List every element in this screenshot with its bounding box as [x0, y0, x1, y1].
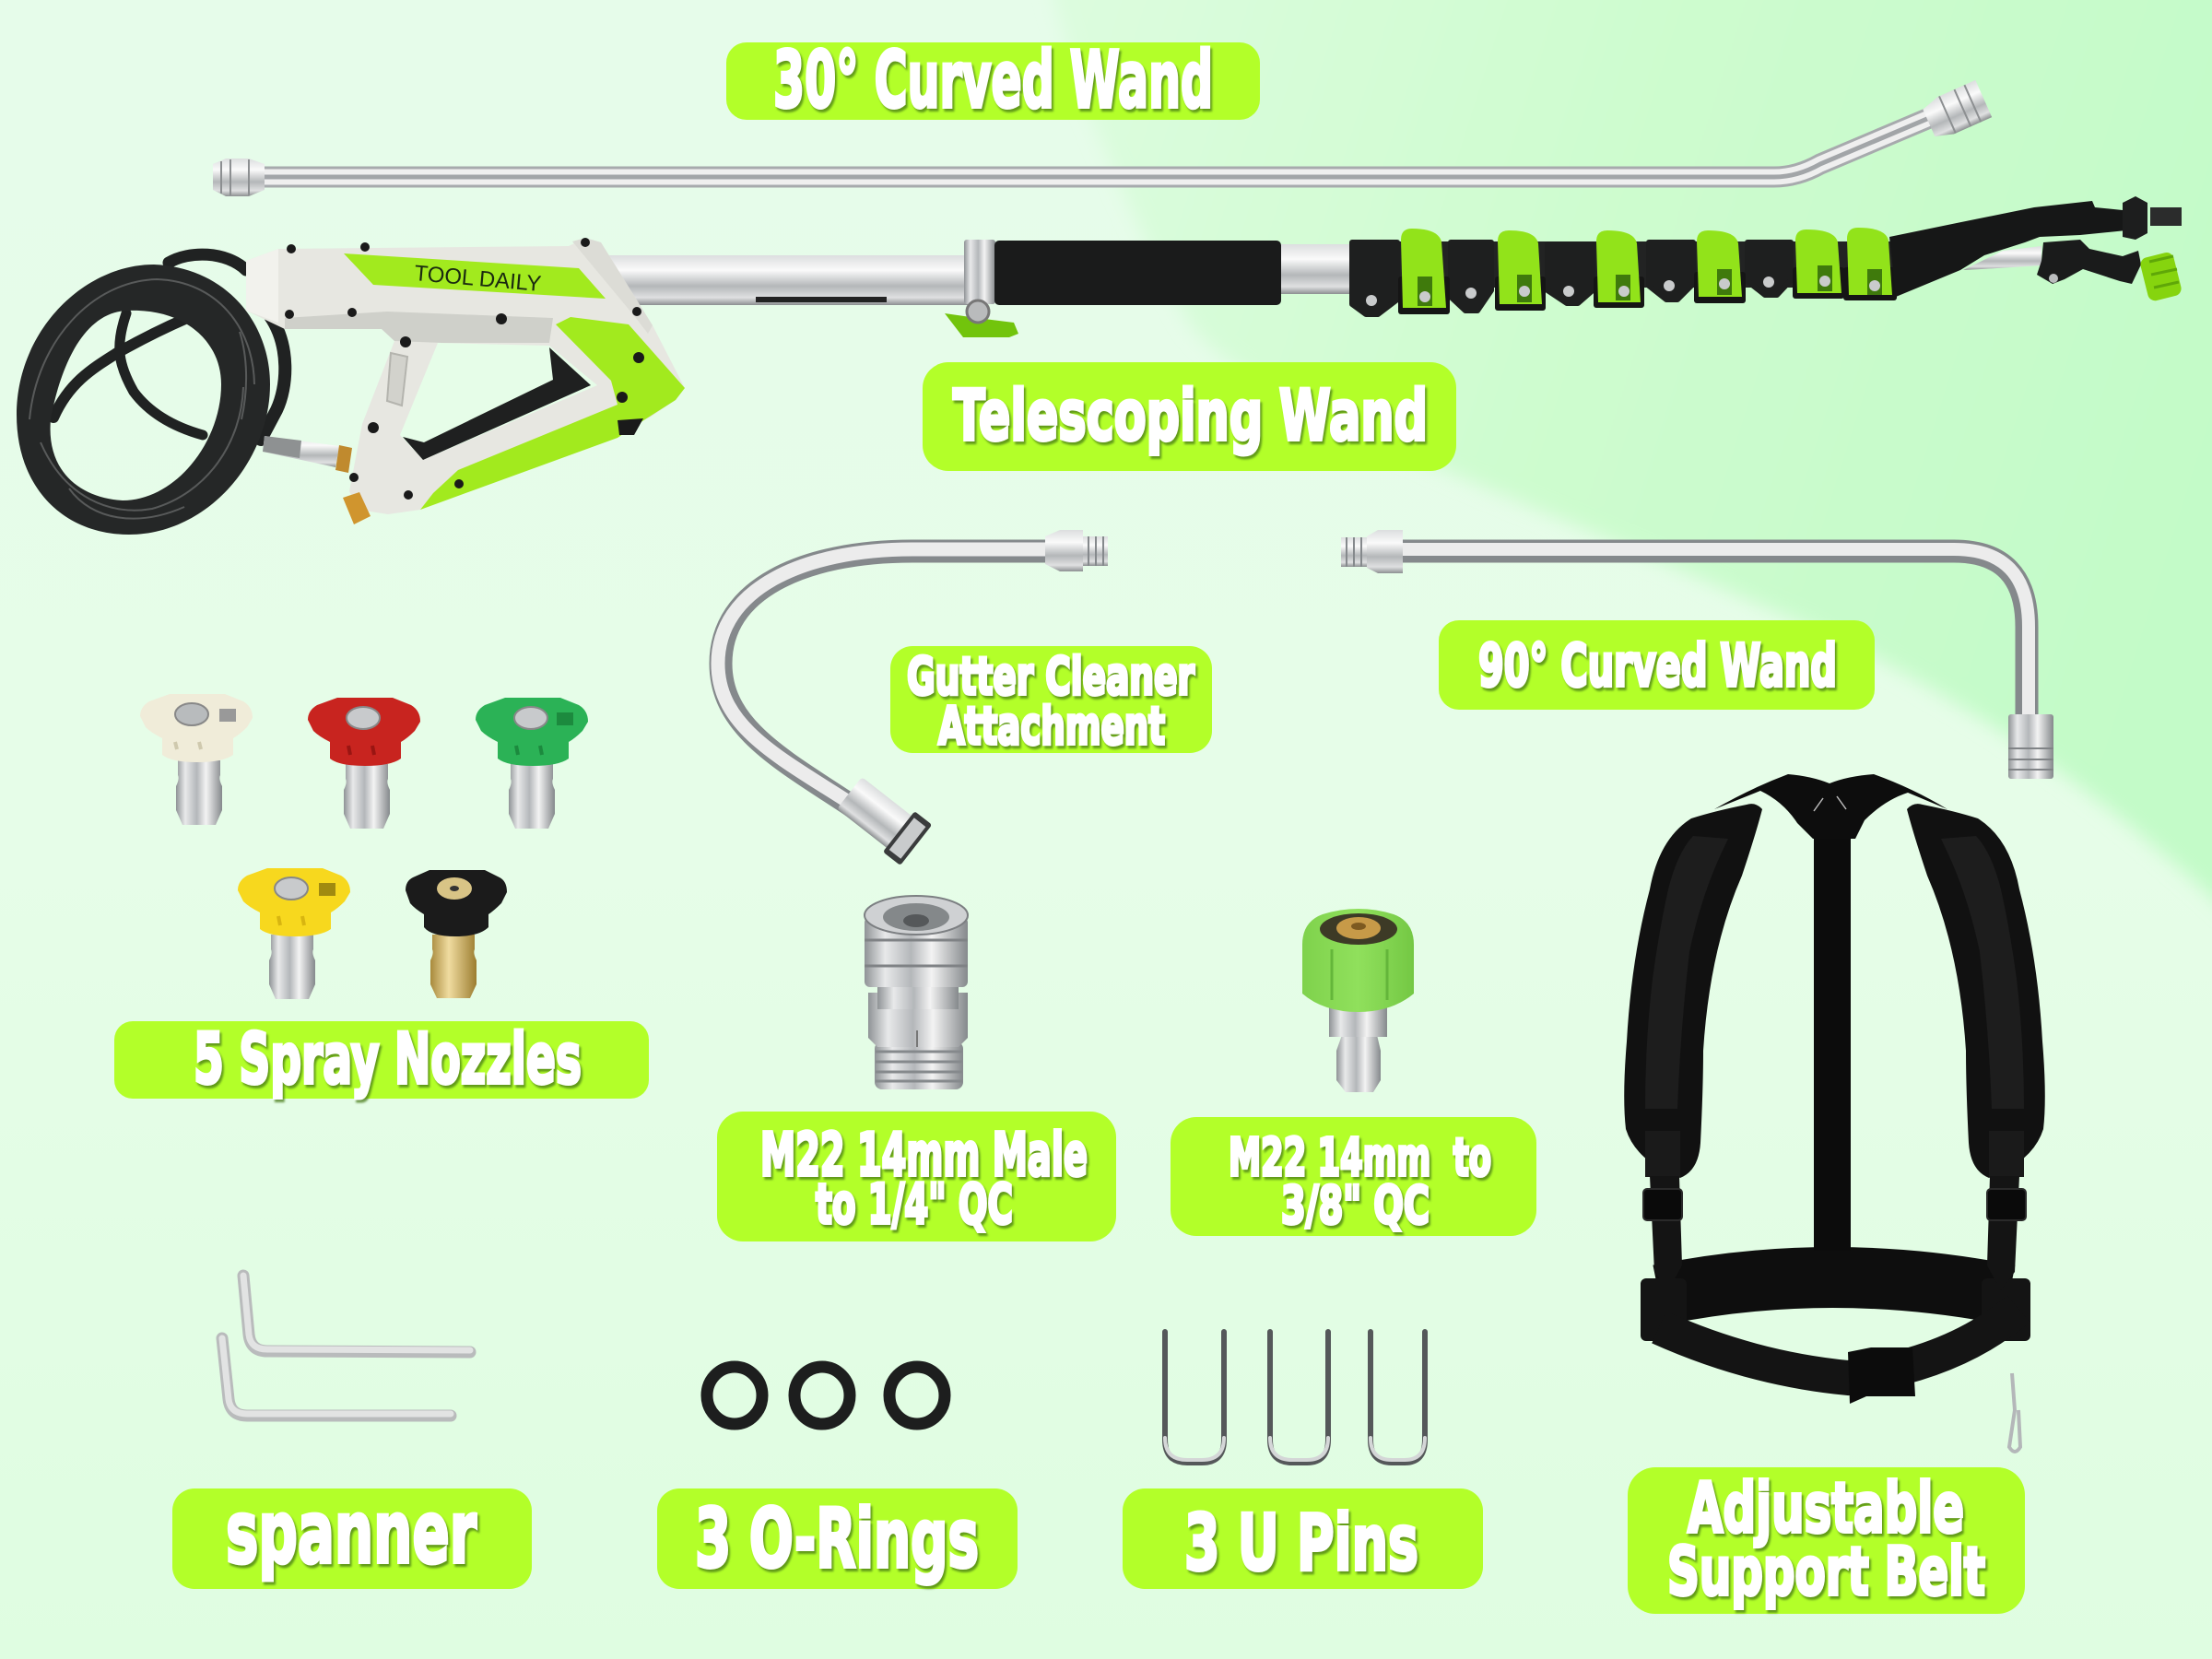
center strap — [1814, 834, 1851, 1251]
90 degree curved wand — [1341, 530, 2053, 779]
label: 5 spray nozzles: 5 Spray Nozzles — [194, 1018, 582, 1100]
label: 30 degree curved wand — [726, 35, 1260, 126]
label: adjustable support belt: Support Belt — [1667, 1533, 1985, 1610]
green grip — [420, 317, 685, 510]
label: gutter cleaner attachment: Gutter Cleaner — [907, 647, 1194, 707]
wand head — [1889, 196, 2183, 302]
gun body — [246, 238, 685, 514]
buckle — [1848, 1347, 1915, 1404]
label: 3 u pins — [1123, 1488, 1483, 1589]
label: 3 o-rings: 3 O-Rings — [695, 1491, 979, 1586]
label: 90 degree curved wand: 90° Curved Wand — [1478, 632, 1837, 700]
M22 to three eighths coupler — [1302, 909, 1414, 1092]
adjustable support belt harness — [1624, 774, 2045, 1452]
front strap — [1659, 1309, 2018, 1378]
nozzle: red — [308, 698, 420, 829]
o-rings — [707, 1367, 945, 1424]
hose coil — [17, 254, 285, 535]
left shoulder pad — [1624, 804, 1762, 1290]
telescoping wand with spray gun — [17, 196, 2183, 535]
label: M22 14mm to three eighths QC — [1171, 1117, 1536, 1236]
nozzle: yellow — [238, 868, 350, 999]
label: telescoping wand — [923, 362, 1456, 471]
30 degree curved wand — [213, 80, 1992, 196]
top yoke — [1714, 774, 1947, 839]
hose fitting — [263, 436, 352, 473]
green top band — [344, 253, 606, 299]
telescoping clamps — [1352, 228, 1897, 314]
brand text: TOOL DAILY — [413, 261, 542, 297]
label: gutter cleaner attachment: Attachment — [938, 697, 1165, 757]
gun plate — [572, 238, 653, 334]
label: M22 14mm to three eighths QC: 3/8" QC — [1281, 1176, 1430, 1236]
M22 male to quarter inch coupler — [865, 896, 968, 1089]
label: M22 14mm to three eighths QC: M22 14mm to — [1229, 1128, 1491, 1188]
spanners — [222, 1276, 470, 1416]
label: 3 o-rings — [657, 1488, 1018, 1589]
label: spanner: spanner — [226, 1483, 477, 1583]
label: adjustable support belt — [1628, 1467, 2025, 1614]
label: 90 degree curved wand — [1439, 620, 1875, 710]
label: 3 u pins: 3 U Pins — [1184, 1498, 1418, 1588]
nozzle: green — [476, 698, 588, 829]
brass inlet — [343, 492, 371, 524]
label: 5 spray nozzles — [114, 1018, 649, 1100]
trigger lining — [403, 347, 591, 460]
foam grip — [994, 241, 1281, 305]
back belt — [1659, 1277, 2009, 1295]
label: spanner — [172, 1483, 532, 1589]
nozzle: white — [140, 694, 253, 825]
clamp and lever — [945, 240, 1018, 337]
u pins — [1165, 1332, 1425, 1463]
label: M22 14mm male to quarter inch QC — [717, 1112, 1116, 1241]
label: adjustable support belt: Adjustable — [1688, 1467, 1964, 1548]
spray nozzles — [140, 694, 588, 999]
nozzle: black — [406, 870, 507, 998]
right shoulder pad — [1907, 804, 2045, 1290]
label: telescoping wand: Telescoping Wand — [953, 374, 1428, 456]
main tube — [590, 255, 977, 305]
label: M22 14mm male to quarter inch QC: to 1/4" QC — [816, 1172, 1013, 1237]
gutter cleaner attachment — [718, 530, 1108, 865]
carabiner — [2009, 1373, 2020, 1452]
label: 30 degree curved wand: 30° Curved Wand — [773, 35, 1213, 126]
label: M22 14mm male to quarter inch QC: M22 14mm Male — [760, 1122, 1088, 1190]
grip texture — [387, 353, 407, 406]
trigger opening — [400, 343, 597, 460]
screws — [285, 238, 644, 500]
label: gutter cleaner attachment — [890, 646, 1212, 757]
